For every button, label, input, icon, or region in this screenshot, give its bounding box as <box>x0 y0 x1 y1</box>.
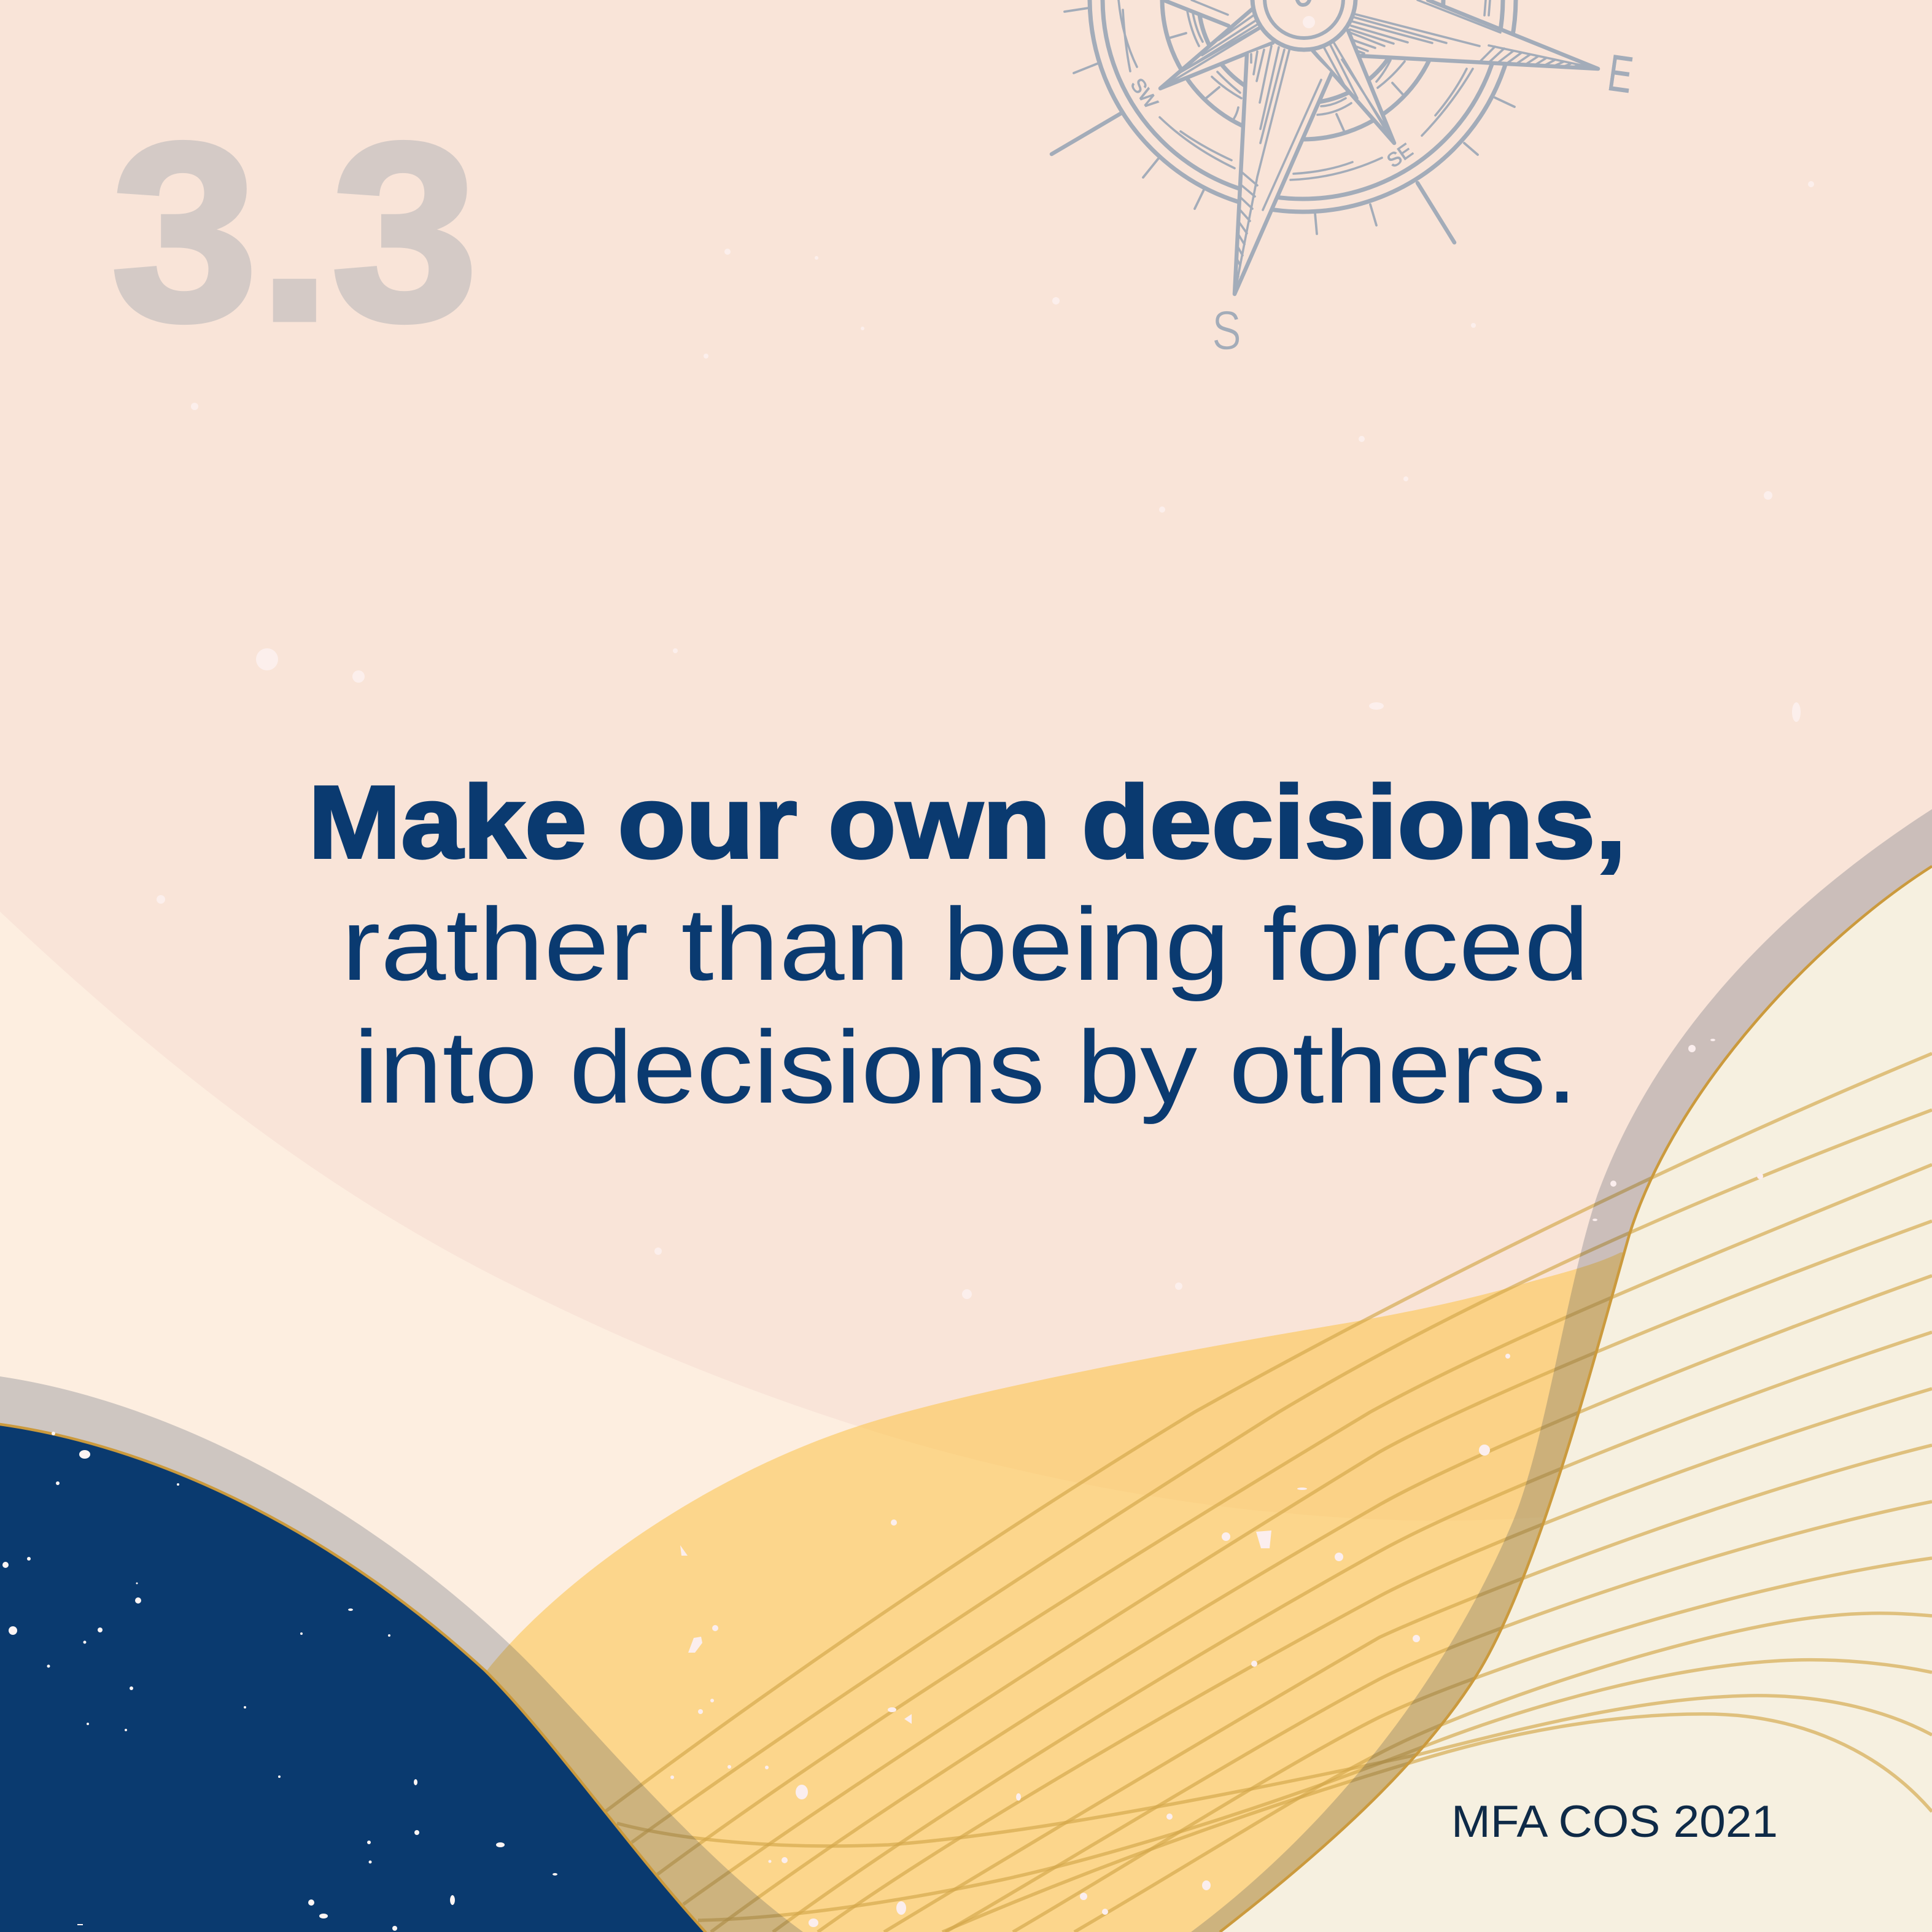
translucent band along cream shape <box>1191 809 1932 1932</box>
specks on yellow and cream shapes <box>670 1039 1763 1927</box>
compass long ticks <box>1052 113 1454 242</box>
south-west spike <box>1160 7 1273 88</box>
body line one: rather than being forced <box>341 886 1589 1002</box>
footer credit: MFA COS 2021 <box>1451 1797 1778 1847</box>
compass label E: E <box>1604 44 1636 104</box>
gold edge of cream shape <box>1220 866 1932 1932</box>
cream shape bottom right <box>1220 866 1932 1932</box>
compass rings <box>1090 0 1516 212</box>
specks on navy shape <box>2 1432 557 1931</box>
golden line fan <box>606 1053 1932 1932</box>
north-west spike <box>1163 0 1265 26</box>
faint specks on peach background <box>157 181 1814 1299</box>
translucent band along navy shape <box>0 1376 803 1932</box>
south-east spike <box>1313 31 1394 143</box>
compass rose illustration <box>1052 0 1598 294</box>
body line two: into decisions by others. <box>354 1009 1578 1125</box>
bold heading line: Make our own decisions, <box>308 764 1626 880</box>
compass hub <box>1252 0 1356 50</box>
navy shape bottom left <box>0 1424 705 1932</box>
east spike <box>1344 0 1598 69</box>
compass label SE: SE <box>1383 139 1417 172</box>
background: peach upper shape <box>0 0 1932 1521</box>
compass ticks <box>1065 8 1515 234</box>
compass thin arcs <box>1119 0 1490 180</box>
compass label S: S <box>1212 300 1241 362</box>
yellow and peach overlap <box>858 1252 1621 1426</box>
section number: 3.3 <box>111 91 478 373</box>
compass label SW: SW <box>1126 74 1163 113</box>
yellow wave shape <box>485 1252 1719 1932</box>
main statement text <box>308 764 1626 1125</box>
south spike <box>1235 37 1332 294</box>
